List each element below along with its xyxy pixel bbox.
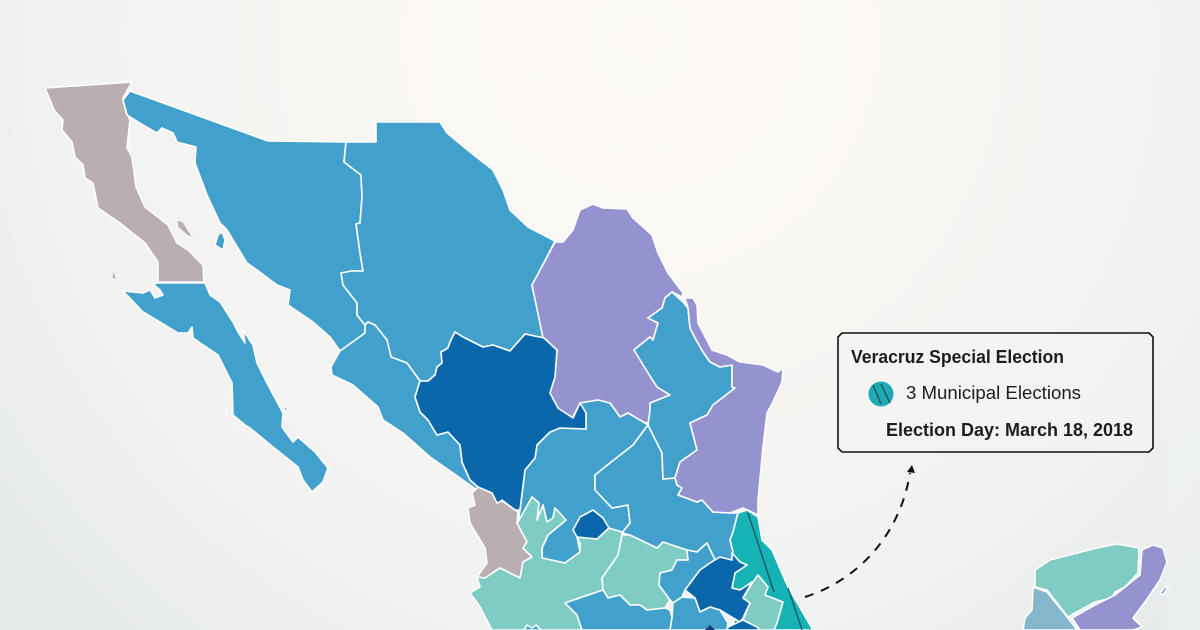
- state: Coahuila: [532, 204, 683, 423]
- island: Carmen: [285, 406, 288, 411]
- state: Campeche: [1023, 587, 1077, 630]
- callout: Veracruz Special Election: [838, 333, 1153, 452]
- callout box: [838, 333, 1153, 452]
- state: Jalisco: [470, 497, 622, 630]
- state: Hidalgo: [685, 553, 752, 622]
- state: Chihuahua: [341, 122, 555, 381]
- state: Sonora: [123, 91, 365, 351]
- state: Estado de Mexico: [670, 597, 728, 630]
- state: Nayarit: [468, 487, 532, 578]
- island: Cozumel: [1160, 587, 1168, 595]
- marker: Mexico City: [705, 625, 715, 630]
- dashed arrow: [805, 465, 915, 597]
- state: Zacatecas: [518, 400, 648, 563]
- state: Quintana Roo: [1072, 545, 1167, 630]
- state: Tamaulipas: [675, 298, 783, 515]
- island: Angel de la Guarda: [177, 220, 193, 238]
- state: Colima: [524, 625, 541, 630]
- island: Tiburon: [215, 232, 225, 250]
- legend icon: hatched circle: [868, 382, 894, 406]
- state: Sinaloa: [331, 322, 478, 490]
- callout heading: Veracruz Special Election: [851, 347, 1064, 367]
- state: Guanajuato: [602, 535, 688, 610]
- state: Baja California Sur: [123, 283, 328, 492]
- state: Queretaro: [659, 543, 715, 603]
- state: Veracruz with hatching: [730, 510, 813, 630]
- state: Aguascalientes: [573, 510, 609, 539]
- state: Durango: [415, 332, 586, 510]
- island: Margarita: [225, 407, 227, 415]
- state: Baja California: [45, 82, 204, 282]
- state: Yucatan: [1035, 544, 1139, 617]
- state: Michoacan: [565, 590, 672, 630]
- election date: Election Day: March 18, 2018: [886, 420, 1133, 440]
- island: Cedros: [112, 270, 117, 280]
- legend label: 3 Municipal Elections: [906, 383, 1081, 403]
- state: Puebla: [743, 575, 783, 630]
- state: Nuevo Leon: [634, 292, 735, 479]
- island: Magdalena: [238, 426, 244, 431]
- state: Morelos: [727, 620, 760, 630]
- state: San Luis Potosi: [595, 425, 738, 560]
